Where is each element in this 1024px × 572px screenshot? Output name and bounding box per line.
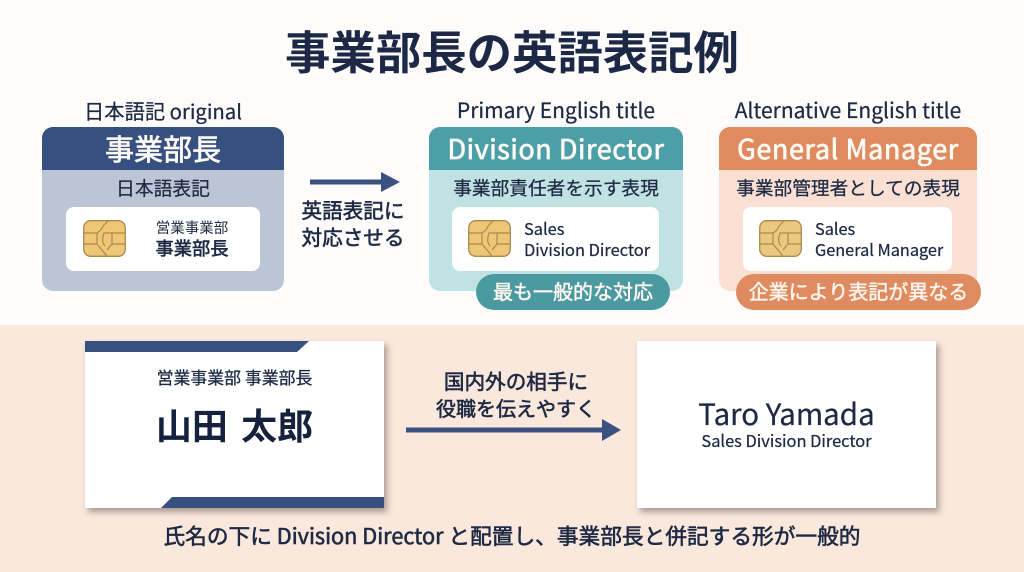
card name: Taro Yamada	[698, 392, 875, 434]
card text	[155, 217, 229, 261]
panel header: 事業部長: 事業部長	[105, 127, 221, 169]
card title: Sales Division Director	[701, 428, 872, 452]
label: original: 日本語記 original	[84, 95, 242, 125]
card name: 山田 太郎	[156, 398, 313, 450]
arrow caption	[436, 365, 596, 422]
card text: 事業部長	[155, 235, 229, 261]
badge: alternative: 企業により表記が異なる	[749, 276, 968, 305]
arrow caption: 役職を伝えやすく	[436, 393, 596, 422]
panel subtitle: 日本語表記	[116, 174, 210, 201]
panel: primary title	[429, 127, 683, 291]
arrow: to English	[310, 172, 400, 192]
card text: 営業事業部	[156, 217, 228, 238]
label: primary: Primary English title	[457, 95, 655, 125]
panel: business card band	[0, 325, 1024, 572]
card text: Sales	[524, 216, 564, 240]
caption: 氏名の下に Division Director と配置し、事業部長と併記する形が一般的	[163, 520, 860, 551]
panel header: 事業部長	[42, 127, 284, 170]
icon: chip	[759, 220, 802, 257]
panel header: General Manager: General Manager	[737, 128, 959, 167]
card: alternative	[743, 207, 952, 271]
badge: primary: 最も一般的な対応	[493, 276, 653, 305]
card text: General Manager	[815, 237, 943, 261]
panel subtitle: 事業部管理者としての表現	[736, 174, 960, 201]
label: alternative: Alternative English title	[735, 95, 961, 125]
card: Japanese	[66, 207, 260, 271]
decorative corner bars	[85, 341, 384, 508]
badge: primary	[476, 274, 670, 310]
card text	[815, 216, 944, 261]
arrow caption: 国内外の相手に	[444, 365, 588, 395]
arrow caption	[302, 194, 404, 251]
arrow: to English card	[406, 419, 621, 441]
panel subtitle: 事業部責任者を示す表現	[453, 174, 659, 201]
title: 事業部長の英語表記例	[285, 17, 739, 83]
card text	[524, 216, 650, 261]
arrow caption: 英語表記に	[302, 194, 404, 224]
card text: Sales	[815, 216, 855, 240]
icon: chip	[468, 220, 511, 257]
panel: alternative title	[719, 127, 977, 291]
business card: Japanese	[85, 341, 384, 508]
panel header: Division Director: Division Director	[447, 128, 664, 167]
icon: chip	[83, 220, 126, 257]
card: primary	[452, 207, 659, 271]
card text: Division Director	[524, 237, 650, 261]
arrow caption: 対応させる	[302, 221, 404, 251]
business card: English	[637, 341, 936, 508]
card title: 営業事業部 事業部長	[157, 364, 312, 389]
panel: Japanese title	[42, 127, 284, 291]
